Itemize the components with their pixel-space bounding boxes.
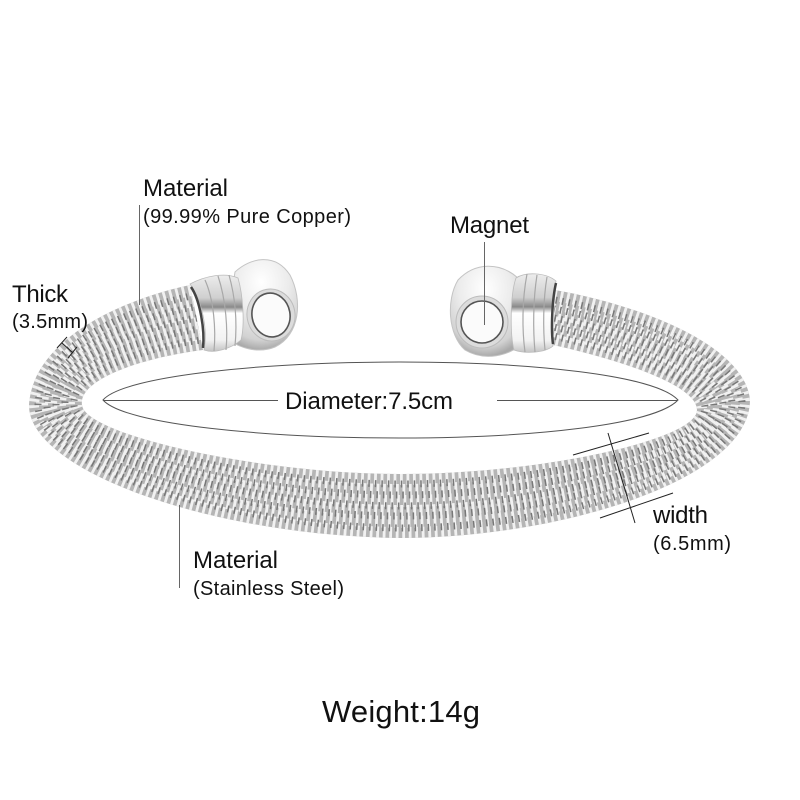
label: width: (6.5mm) (653, 533, 731, 555)
label: material stainless steel (193, 547, 344, 600)
label: material stainless steel: (Stainless Steel) (193, 578, 344, 600)
label: weight: Weight:14g (322, 694, 480, 729)
label: thick (12, 281, 88, 333)
right ribbed collar (511, 274, 556, 352)
right ball (450, 266, 520, 356)
diameter label: Diameter:7.5cm (285, 388, 453, 415)
right end cap (450, 266, 556, 356)
thickness marker (57, 337, 77, 358)
infographic: bracelet specifications (12, 178, 750, 728)
label: thick: Thick (12, 281, 69, 308)
width marker (573, 433, 673, 523)
label: material copper: (99.99% Pure Copper) (143, 206, 351, 228)
label: material copper: Material (143, 175, 228, 202)
right magnet (456, 296, 508, 348)
label: thick: (3.5mm) (12, 311, 88, 333)
left end cap (190, 260, 299, 351)
diameter ellipse and line (103, 362, 678, 438)
stainless leader line (178, 505, 180, 588)
label: width (652, 502, 731, 555)
left magnet (243, 285, 299, 345)
label: material stainless steel: Material (193, 547, 278, 574)
label: magnet: Magnet (450, 212, 529, 239)
bracelet mesh band (29, 285, 750, 538)
magnet leader line (484, 242, 486, 325)
left ribbed collar (190, 275, 243, 351)
label: material copper (143, 175, 351, 228)
label: width: width (652, 502, 708, 529)
left ball (225, 260, 298, 350)
copper material leader line (138, 205, 140, 305)
